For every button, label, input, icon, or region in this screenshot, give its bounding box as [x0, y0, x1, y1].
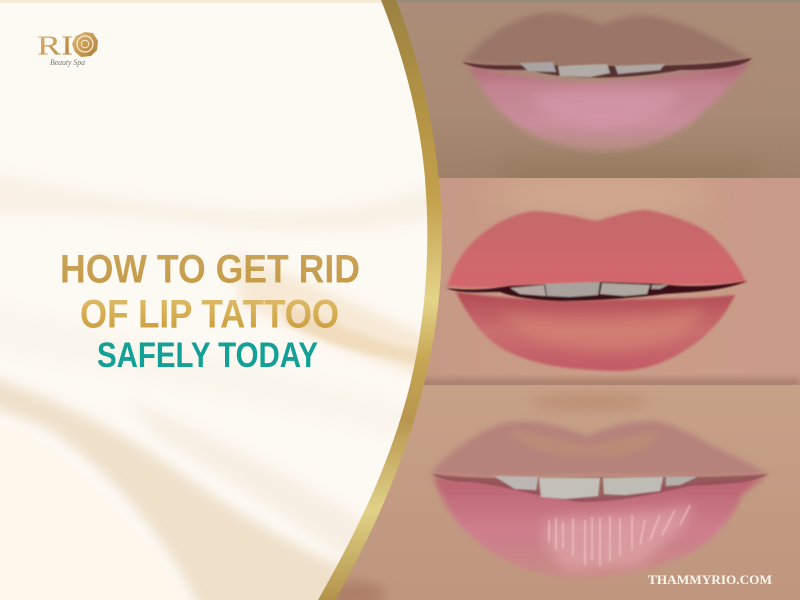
logo wordmark: RI	[37, 30, 73, 60]
lower lip	[468, 60, 750, 151]
lower lip	[456, 292, 735, 371]
mouth line and teeth	[462, 58, 752, 78]
logo	[37, 30, 98, 67]
title	[60, 248, 360, 375]
website watermark: THAMMYRIO.COM	[648, 572, 772, 587]
subtitle: SAFELY TODAY	[97, 336, 318, 375]
upper lip	[430, 421, 770, 477]
mouth line and teeth	[432, 474, 768, 502]
title line 2: OF LIP TATTOO	[80, 292, 339, 336]
photo: red tattooed lips	[424, 178, 800, 385]
gold curved band	[318, 0, 442, 600]
upper lip	[462, 13, 750, 68]
lip gloss highlights	[545, 505, 695, 570]
photo: natural lips after removal	[300, 385, 800, 600]
mouth line and teeth	[446, 281, 748, 301]
top edge strip	[370, 0, 800, 2]
title line 1: HOW TO GET RID	[60, 248, 360, 292]
lower lip	[433, 477, 766, 577]
icon: gold rose	[72, 32, 98, 57]
upper lip	[447, 210, 746, 288]
background: cream silk fabric	[0, 0, 450, 600]
logo tagline: Beauty Spa	[50, 58, 85, 67]
photo: lips before removal	[396, 0, 800, 178]
